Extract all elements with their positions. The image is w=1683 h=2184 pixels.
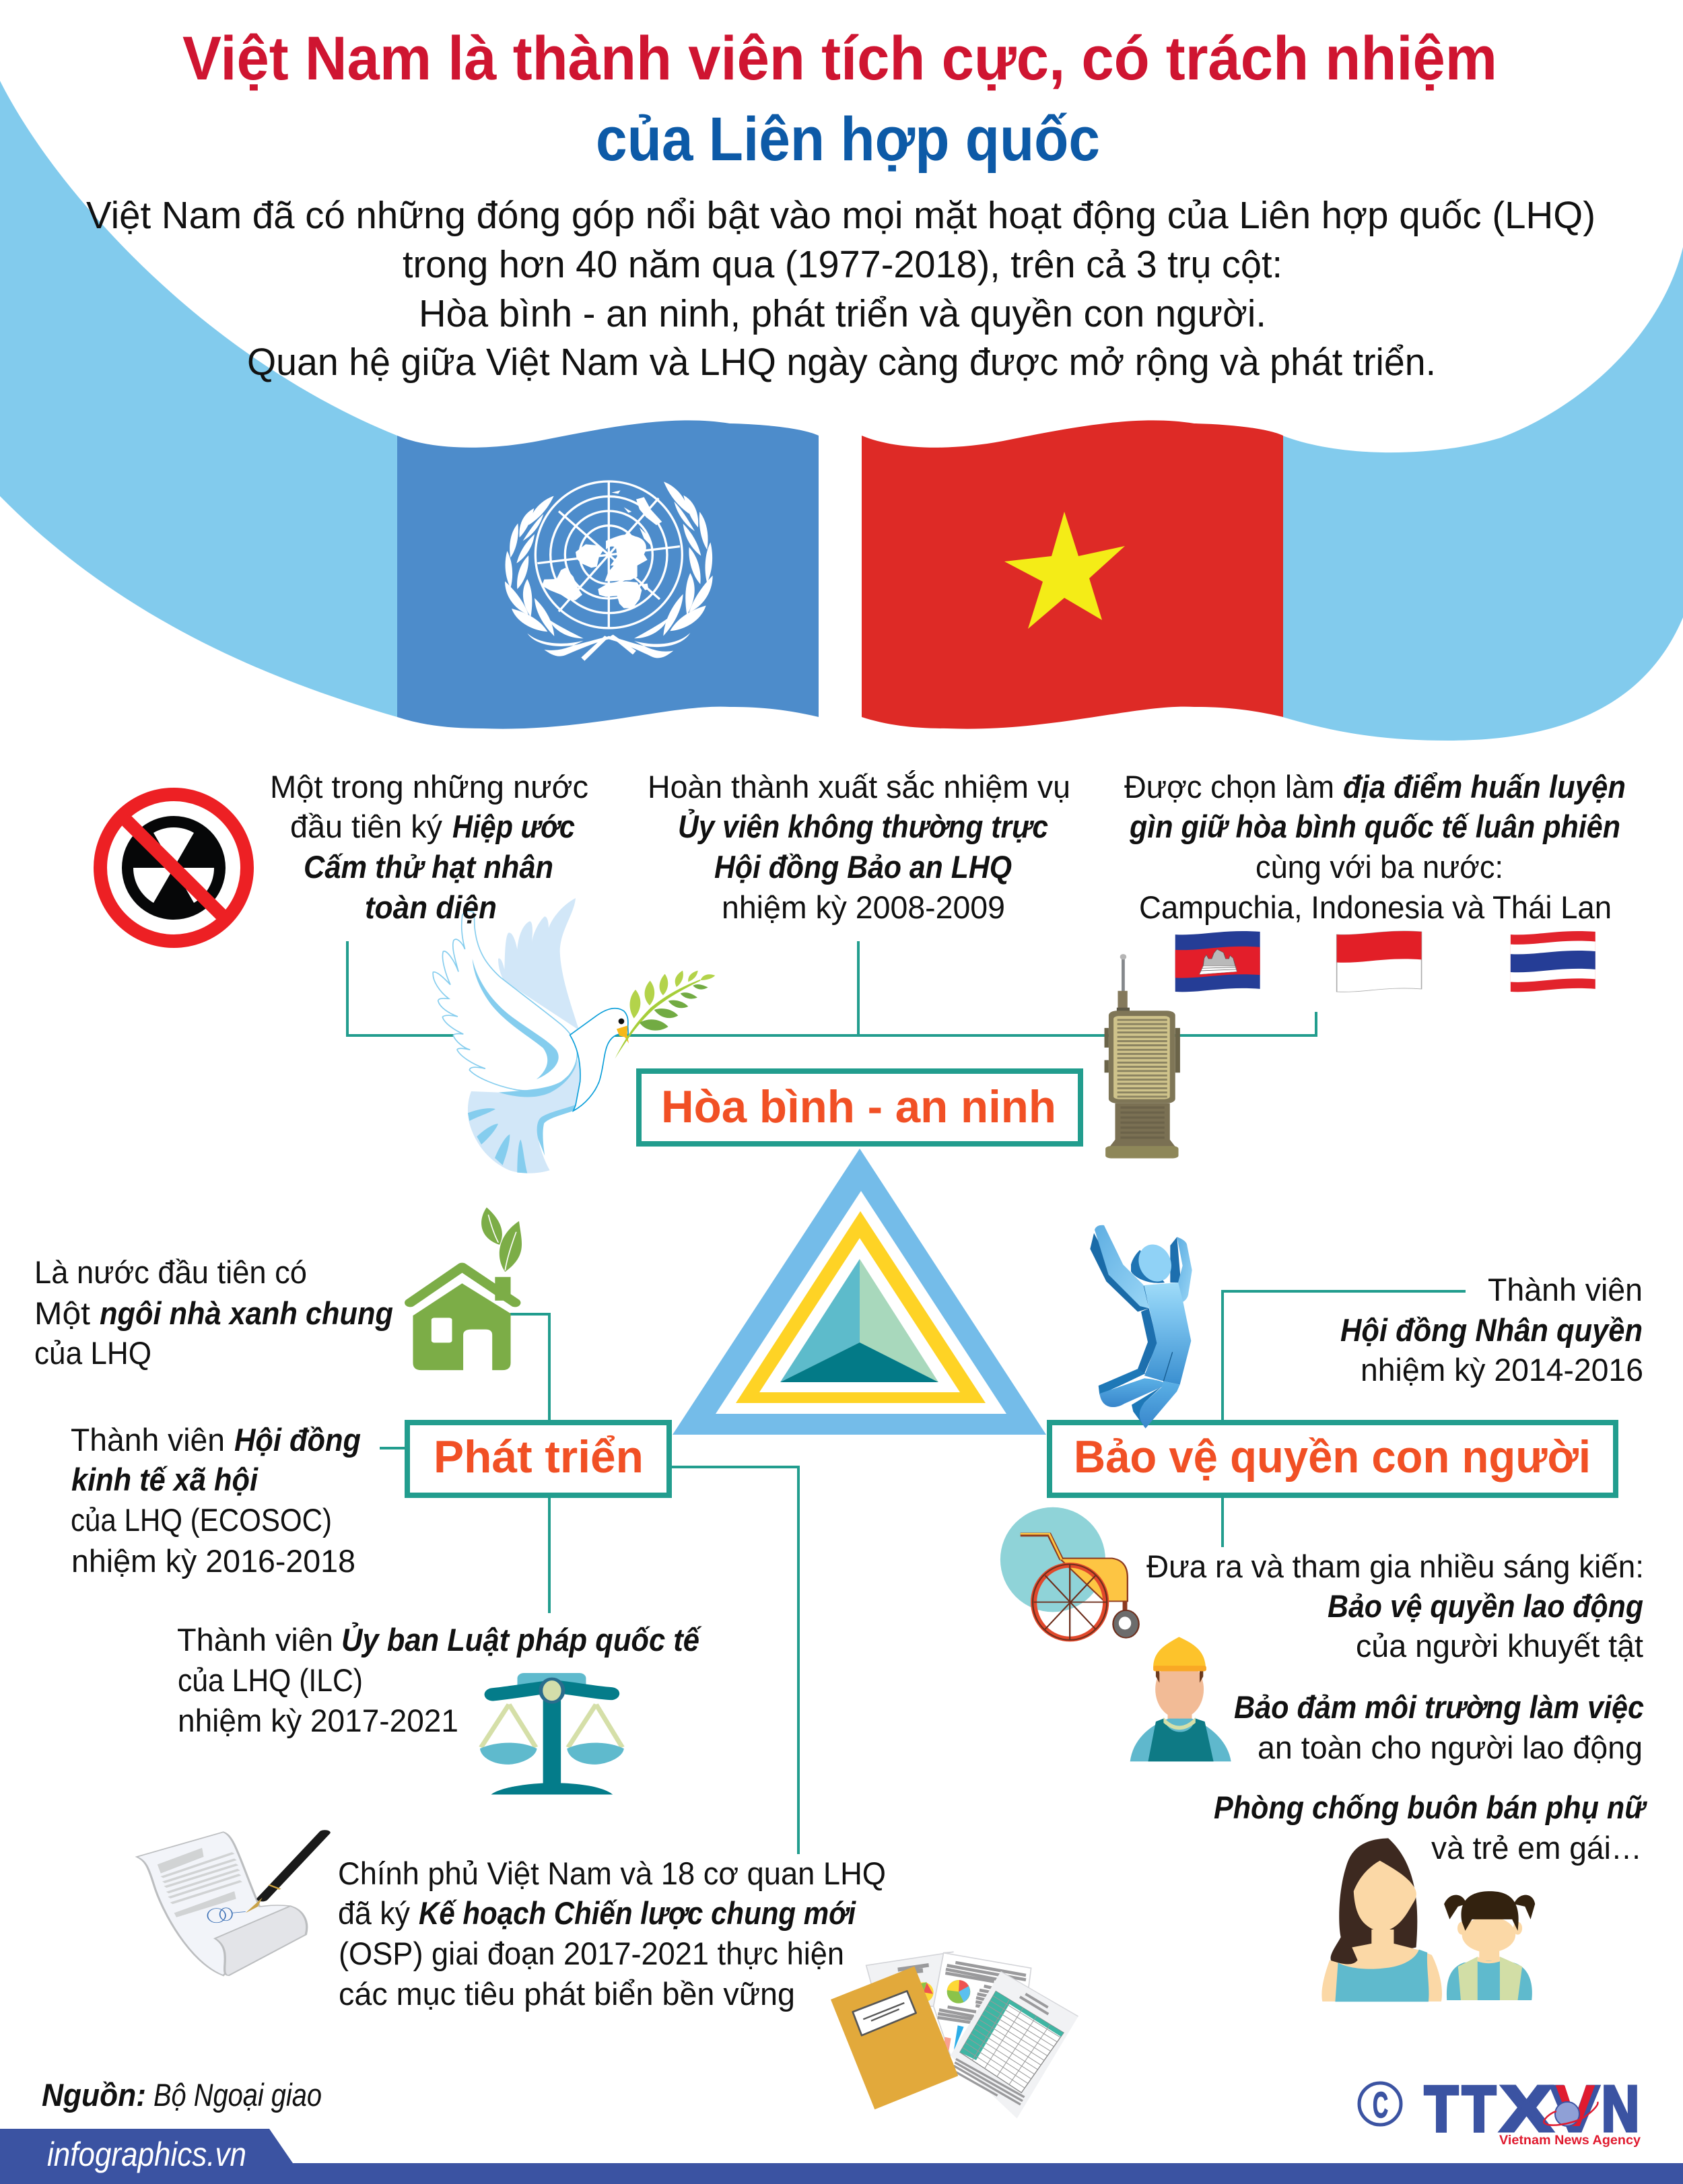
title: của Liên hợp quốc xyxy=(596,105,1100,174)
TTXVN logo: N xyxy=(1602,2073,1639,2145)
TTXVN logo xyxy=(1424,2072,1641,2148)
text: UN Strategic Plan OSP: (OSP) giai đoạn 2017-2021 thực hiện xyxy=(339,1936,844,1971)
connector lines xyxy=(347,941,1466,1854)
text: ECOSOC member: kinh tế xã hội xyxy=(71,1462,259,1497)
text: peacekeeping training site: cùng với ba nước: xyxy=(1256,849,1503,885)
icon: wheelchair xyxy=(1000,1507,1139,1640)
icon: flags of Cambodia, Indonesia, Thailand xyxy=(1175,931,1595,992)
text: UN Strategic Plan OSP: Chính phủ Việt Nam và 18 cơ quan LHQ xyxy=(338,1855,886,1891)
icon: yellow star xyxy=(1004,512,1125,629)
title xyxy=(182,24,1497,174)
text: green One UN house: của LHQ xyxy=(34,1335,151,1371)
TTXVN logo: T xyxy=(1424,2073,1458,2145)
icon: walkie-talkie radio xyxy=(1105,954,1180,1159)
text: Human Rights Council member xyxy=(1340,1272,1643,1388)
text: International Law Commission member xyxy=(177,1622,702,1738)
source: Bộ Ngoại giao xyxy=(153,2077,322,2113)
flag: Indonesia xyxy=(1337,931,1422,992)
intro text block xyxy=(86,194,1595,384)
TTXVN logo: X xyxy=(1501,2073,1552,2145)
TTXVN logo: Vietnam News Agency xyxy=(1499,2134,1641,2148)
text: nuclear test ban treaty xyxy=(270,769,588,925)
icon: balance scale xyxy=(480,1673,624,1795)
footer bar with site name: infographics.vn xyxy=(47,2136,246,2173)
text: ECOSOC member: của LHQ (ECOSOC) xyxy=(71,1502,332,1538)
heading: Phát triển xyxy=(407,1423,669,1495)
icon: documents and folder xyxy=(831,1952,1078,2119)
text: UN Strategic Plan OSP xyxy=(338,1855,886,2012)
text: green One UN house: Một xyxy=(34,1295,90,1331)
flag: Cambodia xyxy=(1175,931,1260,992)
central triangle pyramid xyxy=(673,1149,1046,1435)
UN flag xyxy=(397,420,819,729)
icon: mother and daughter xyxy=(1321,1838,1535,2002)
text: anti-trafficking: Phòng chống buôn bán phụ nữ xyxy=(1214,1789,1647,1825)
heading: Bảo vệ quyền con người xyxy=(1050,1423,1616,1495)
text: International Law Commission member: của LHQ (ILC) xyxy=(178,1662,363,1698)
text: nuclear test ban treaty: Cấm thử hạt nhân xyxy=(304,849,553,885)
heading: Phát triển: Phát triển xyxy=(434,1431,644,1482)
intro text block: Quan hệ giữa Việt Nam và LHQ ngày càng được mở rộng và phát triển. xyxy=(247,341,1436,384)
text: labour rights initiatives: Đưa ra và tham gia nhiều sáng kiến: xyxy=(1146,1548,1644,1584)
icon: green house with leaves xyxy=(410,1207,522,1370)
flag: Thailand xyxy=(1511,931,1595,992)
text: ECOSOC member: Thành viên xyxy=(71,1422,225,1458)
footer bar with site name xyxy=(0,2129,1683,2184)
text: green One UN house: Là nước đầu tiên có xyxy=(34,1254,307,1290)
intro text block: trong hơn 40 năm qua (1977-2018), trên cả 3 trụ cột: xyxy=(403,243,1282,286)
icon: peace dove with olive branch xyxy=(433,898,715,1173)
text: nuclear test ban treaty: đầu tiên ký xyxy=(290,809,442,844)
title: Việt Nam là thành viên tích cực, có trách nhiệm xyxy=(182,24,1497,93)
intro text block: Hòa bình - an ninh, phát triển và quyền con người. xyxy=(419,292,1266,335)
text: Human Rights Council member: Thành viên xyxy=(1488,1272,1643,1307)
TTXVN logo: V xyxy=(1551,2073,1599,2145)
source: Nguồn: xyxy=(42,2077,146,2113)
text: International Law Commission member: Thành viên xyxy=(177,1622,333,1658)
text: ECOSOC member xyxy=(71,1422,361,1579)
sky-blue ribbon background xyxy=(0,81,1683,741)
heading: Bảo vệ quyền con người: Bảo vệ quyền con người xyxy=(1074,1431,1591,1482)
TTXVN logo: V xyxy=(1555,2072,1595,2139)
text: peacekeeping training site: gìn giữ hòa bình quốc tế luân phiên xyxy=(1129,809,1620,844)
text: UN Strategic Plan OSP: đã ký xyxy=(338,1895,410,1931)
text: Security Council member: Hoàn thành xuất sắc nhiệm vụ xyxy=(648,769,1070,805)
copyright logo xyxy=(1359,2083,1401,2125)
source xyxy=(42,2077,322,2113)
text: ECOSOC member: nhiệm kỳ 2016-2018 xyxy=(71,1543,355,1579)
text: peacekeeping training site: địa điểm huấn luyện xyxy=(1343,769,1626,805)
text: labour rights initiatives: Bảo đảm môi trường làm việc xyxy=(1234,1689,1644,1725)
text: labour rights initiatives: an toàn cho người lao động xyxy=(1258,1730,1643,1765)
text: nuclear test ban treaty: Hiệp ước xyxy=(452,809,575,844)
text: anti-trafficking xyxy=(1214,1789,1647,1866)
text: peacekeeping training site: Campuchia, Indonesia và Thái Lan xyxy=(1139,889,1612,925)
text: International Law Commission member: nhiệm kỳ 2017-2021 xyxy=(178,1703,458,1738)
text: UN Strategic Plan OSP: các mục tiêu phát biển bền vững xyxy=(339,1976,795,2012)
icon: no nuclear sign xyxy=(100,794,247,941)
text: nuclear test ban treaty: Một trong những nước xyxy=(270,769,588,805)
text: Security Council member: Hội đồng Bảo an LHQ xyxy=(714,849,1012,885)
text: International Law Commission member: Ủy ban Luật pháp quốc tế xyxy=(341,1622,702,1658)
icon: jumping blue figure xyxy=(1090,1225,1192,1429)
Vietnam flag xyxy=(862,420,1283,729)
icon: UN emblem xyxy=(505,481,713,661)
heading: Hòa bình - an ninh xyxy=(639,1071,1080,1144)
icon: construction worker xyxy=(1130,1637,1231,1761)
TTXVN logo: T xyxy=(1462,2073,1496,2145)
copyright logo: C xyxy=(1373,2085,1388,2125)
text: Human Rights Council member: Hội đồng Nhân quyền xyxy=(1340,1312,1643,1348)
text: labour rights initiatives: Bảo vệ quyền lao động xyxy=(1328,1588,1643,1624)
icon: signed paper and pen xyxy=(137,1832,324,1975)
text: peacekeeping training site: Được chọn làm xyxy=(1124,769,1334,805)
heading: Hòa bình - an ninh: Hòa bình - an ninh xyxy=(661,1081,1056,1132)
text: peacekeeping training site xyxy=(1124,769,1626,925)
text: anti-trafficking: và trẻ em gái… xyxy=(1431,1830,1642,1866)
text: green One UN house: ngôi nhà xanh chung xyxy=(100,1295,393,1331)
text: Security Council member xyxy=(648,769,1070,925)
text: nuclear test ban treaty: toàn diện xyxy=(365,889,497,925)
text: Security Council member: Ủy viên không thường trực xyxy=(678,809,1048,844)
text: labour rights initiatives xyxy=(1146,1548,1644,1765)
text: Security Council member: nhiệm kỳ 2008-2009 xyxy=(722,889,1005,925)
text: labour rights initiatives: của người khuyết tật xyxy=(1356,1628,1643,1664)
text: green One UN house xyxy=(34,1254,393,1371)
text: Human Rights Council member: nhiệm kỳ 2014-2016 xyxy=(1361,1352,1643,1388)
text: ECOSOC member: Hội đồng xyxy=(234,1422,361,1458)
intro text block: Việt Nam đã có những đóng góp nổi bật vào mọi mặt hoạt động của Liên hợp quốc (LHQ) xyxy=(86,194,1595,237)
text: UN Strategic Plan OSP: Kế hoạch Chiến lược chung mới xyxy=(419,1895,856,1931)
